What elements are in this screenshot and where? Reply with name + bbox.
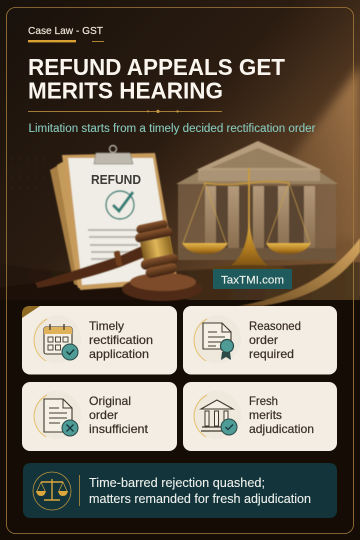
- courthouse: [176, 141, 338, 260]
- card text: [89, 319, 153, 361]
- subtitle: Limitation starts from a timely decided rectification order: [28, 123, 316, 135]
- clip: [110, 146, 116, 152]
- title: [28, 54, 285, 104]
- card text: insufficient: [89, 422, 149, 436]
- card text: required: [249, 347, 294, 361]
- card text: order: [249, 333, 278, 347]
- card text: adjudication: [249, 422, 314, 436]
- card text: Reasoned: [249, 319, 301, 333]
- card: original order insufficient: [22, 382, 177, 451]
- banner text: matters remanded for fresh adjudication: [89, 492, 311, 506]
- card text: [249, 319, 301, 361]
- card text: order: [89, 408, 118, 422]
- gavel: [35, 219, 202, 301]
- card: fresh merits adjudication: [183, 382, 337, 451]
- card text: Timely: [89, 319, 124, 333]
- dot pattern: [12, 158, 44, 188]
- icon: document with seal: [193, 315, 241, 363]
- icon: courthouse with check: [193, 391, 241, 439]
- card text: Fresh: [249, 394, 278, 408]
- title divider: [28, 110, 222, 113]
- conclusion banner: [23, 463, 337, 518]
- icon: scales: [33, 472, 71, 510]
- site label: [213, 269, 292, 289]
- icon: calendar: [33, 315, 81, 363]
- icon: document with cross: [33, 391, 81, 439]
- card text: application: [89, 347, 149, 361]
- card text: rectification: [89, 333, 153, 347]
- clipboard: [50, 146, 178, 290]
- card text: [249, 394, 314, 436]
- card text: merits: [249, 408, 282, 422]
- document title: REFUND: [91, 173, 141, 187]
- card text: [89, 394, 149, 436]
- card: reasoned order required: [183, 306, 337, 374]
- banner text: [89, 476, 311, 506]
- tag: Case Law - GST: [28, 25, 104, 42]
- title: MERITS HEARING: [28, 78, 223, 104]
- banner text: Time-barred rejection quashed;: [89, 476, 265, 490]
- site label: TaxTMI.com: [221, 274, 284, 286]
- card text: Original: [89, 394, 131, 408]
- scales of justice: [182, 168, 311, 273]
- check mark: [106, 191, 134, 219]
- swoosh: [238, 238, 360, 306]
- card: timely rectification application: [22, 306, 177, 374]
- title: REFUND APPEALS GET: [28, 54, 285, 80]
- tag: Case Law - GST: Case Law - GST: [28, 25, 104, 37]
